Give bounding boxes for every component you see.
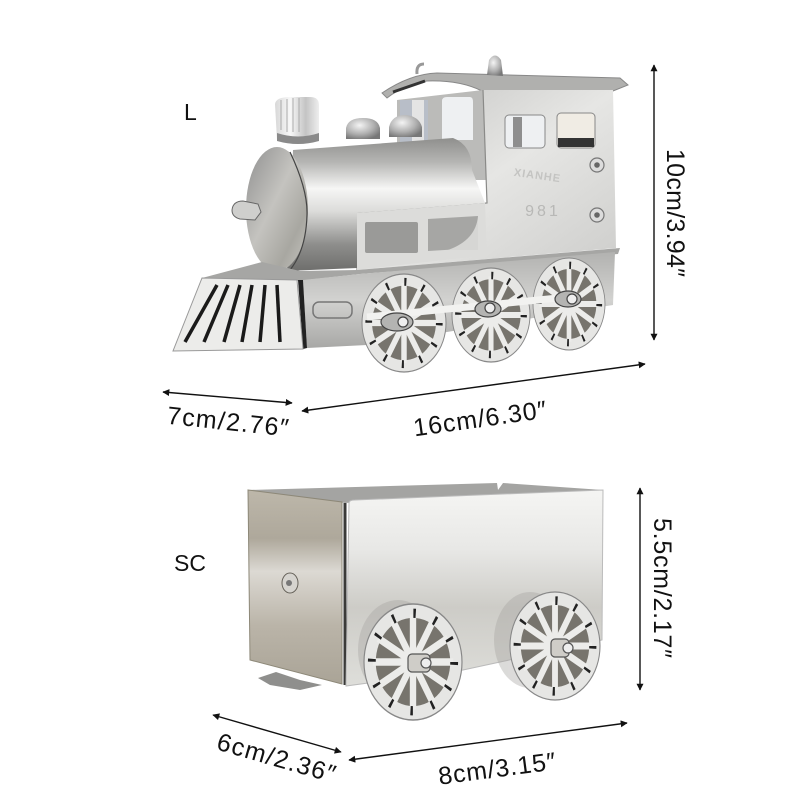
lower body: [298, 252, 615, 349]
cab roof: [382, 56, 628, 98]
dimension: 8cm: 8cm/3.15″: [437, 747, 557, 791]
emblem text: XIANHE: [513, 167, 562, 185]
wagon end face: [248, 490, 342, 684]
wheel shadows: [358, 592, 566, 700]
window panel: [357, 203, 487, 270]
wagon wheel rear: [510, 592, 600, 700]
label: L: L: [184, 99, 197, 125]
cowcatcher: [173, 278, 303, 351]
chimney: [275, 97, 319, 144]
base clip: [258, 672, 322, 690]
cab front frame: [397, 90, 487, 180]
deck: [202, 248, 620, 281]
cab screws: [590, 158, 604, 222]
dimension: 16cm: 16cm/6.30″: [412, 396, 548, 442]
wagon side face: [346, 490, 603, 686]
domes: [346, 115, 422, 139]
axle bolts: [408, 639, 573, 672]
wheel 1: [362, 274, 446, 372]
cab windows: [505, 113, 595, 148]
dimension: 16cm: [302, 364, 645, 442]
dimension: 10cm: 10cm/3.94″: [661, 149, 689, 277]
boiler: [232, 138, 485, 271]
dimension: 6cm: 6cm/2.36″: [214, 728, 339, 789]
number 981: 981: [525, 203, 561, 220]
wagon inner back wall: [248, 483, 603, 503]
nose cone: [232, 201, 261, 220]
wagon corner seam: [344, 503, 346, 685]
wheel 2: [452, 268, 530, 362]
dimension: 5.5cm: 5.5cm/2.17″: [648, 518, 676, 658]
dimension: 7cm: 7cm/2.76″: [166, 402, 290, 442]
wheel 3: [533, 258, 605, 350]
coupling rod: [367, 291, 581, 331]
label: SC: SC: [174, 550, 206, 576]
end screw: [282, 573, 298, 593]
boiler front: [246, 147, 308, 271]
dimension: 8cm: [349, 723, 627, 791]
locomotive: [173, 56, 628, 372]
coal wagon: [248, 483, 603, 720]
cab side panel: [357, 90, 616, 270]
wagon wheel front: [364, 604, 462, 720]
